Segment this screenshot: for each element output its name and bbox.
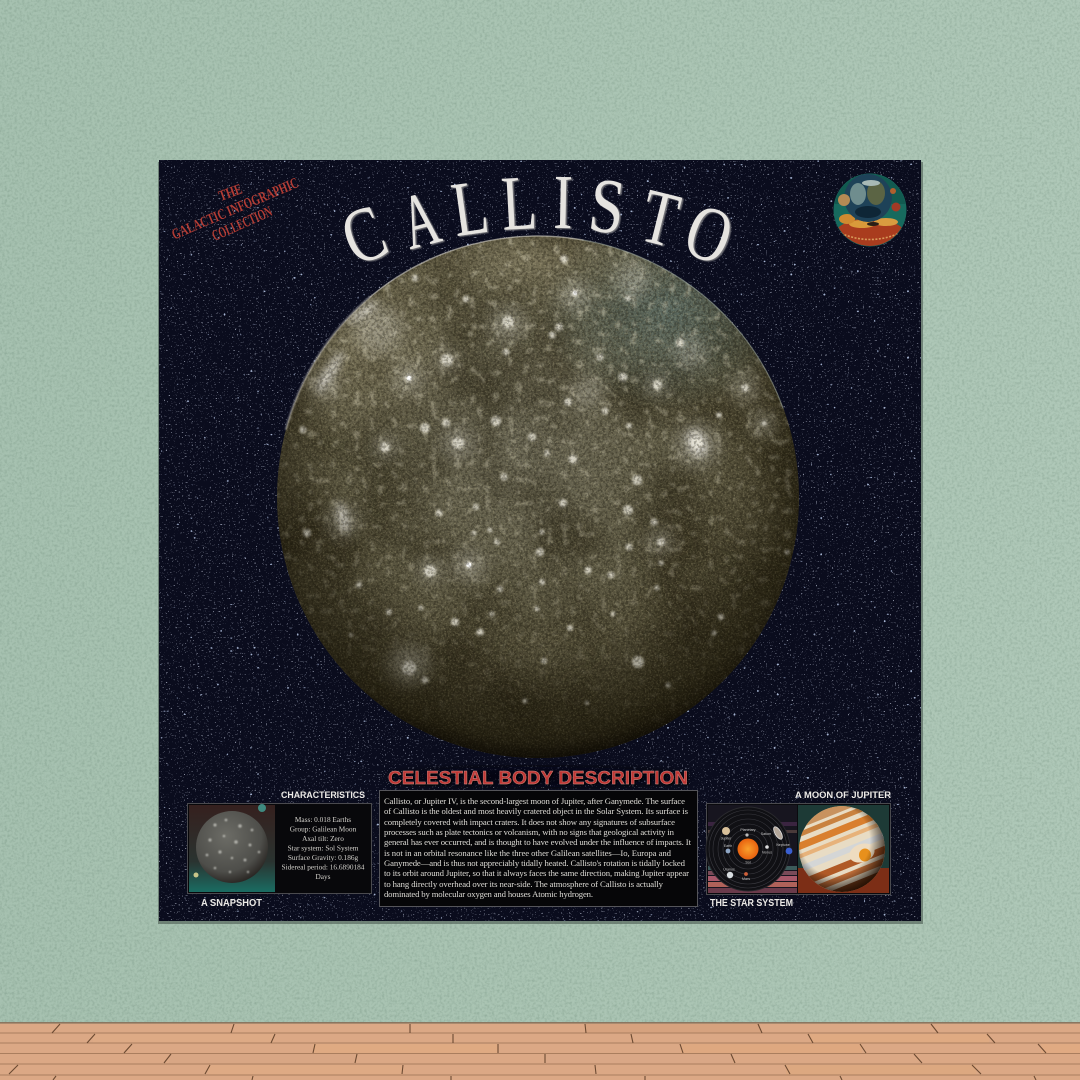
title: Callisto: L xyxy=(499,159,539,247)
poster background with stars xyxy=(159,160,921,921)
characteristics list: Sidereal period: 16.6890184 xyxy=(282,862,365,872)
description panel: dominated by molecular oxygen and houses Atomic hydrogen. xyxy=(384,889,593,899)
characteristics list: Surface Gravity: 0.186g xyxy=(288,853,359,862)
characteristics panel xyxy=(188,804,372,894)
crater halos xyxy=(311,264,776,685)
collection label: THE xyxy=(217,182,245,205)
crater rays xyxy=(313,298,711,534)
characteristics list: Axal tilt: Zero xyxy=(302,834,344,843)
snapshot image xyxy=(189,804,275,892)
characteristics list xyxy=(282,815,365,881)
characteristics list: Star system: Sol System xyxy=(288,844,359,852)
star system diagram: Saturn xyxy=(761,832,771,836)
description panel: Ganymede—and is thus not appreciably tidally heated. Callisto's rotation is tidally locked xyxy=(384,858,686,868)
description panel: of Callisto is the oldest and most heavily cratered object in the Solar System. Its surface is xyxy=(384,806,689,816)
title: Callisto: A xyxy=(392,174,448,267)
description panel: Callisto, or Jupiter IV, is the second-largest moon of Jupiter, after Ganymede. The surface xyxy=(384,796,685,806)
section heading: celestial body description: CELESTIAL BODY DESCRIPTION xyxy=(388,767,688,788)
star system diagram xyxy=(706,805,797,893)
caption: the star system: THE STAR SYSTEM xyxy=(710,898,793,909)
planet Callisto xyxy=(240,210,810,765)
star system diagram: Venus xyxy=(762,850,772,854)
star system diagram: Neptune xyxy=(776,843,790,847)
wooden floor xyxy=(0,1022,1080,1080)
title: Callisto: I xyxy=(553,158,573,245)
description panel: completely covered with impact craters. It does not show any signatures of subsurface xyxy=(384,817,675,827)
star system diagram: Planetary xyxy=(740,828,756,832)
title: Callisto: L xyxy=(447,163,493,253)
caption: a moon of jupiter: A MOON OF JUPITER xyxy=(795,790,891,801)
description panel: is not in an orbital resonance like the three other Galilean satellites—Io, Europa and xyxy=(384,848,672,858)
badge emblem xyxy=(834,174,906,246)
title: Callisto: T xyxy=(632,172,688,264)
description panel: to hang directly overhead over its near-side. The atmosphere of Callisto is actually xyxy=(384,879,664,889)
right image panel xyxy=(706,803,891,895)
rim highlight xyxy=(286,236,783,429)
star system diagram: Earth xyxy=(724,844,732,848)
title: Callisto: O xyxy=(674,186,744,282)
star system diagram: Mars xyxy=(742,877,750,881)
characteristics list: Group: Galilean Moon xyxy=(290,824,357,834)
description panel: processes such as plate tectonics or volcanism, with no signs that geological activity in xyxy=(384,827,675,837)
star system diagram: Uranus xyxy=(723,868,735,872)
star system diagram: Sol xyxy=(745,860,751,864)
caption: a snapshot: A SNAPSHOT xyxy=(201,898,262,909)
crater bright spots xyxy=(300,255,790,705)
earth in badge xyxy=(844,174,892,222)
jupiter image xyxy=(798,805,889,893)
characteristics list: Days xyxy=(316,872,331,881)
characteristics heading: CHARACTERISTICS xyxy=(281,790,365,801)
characteristics list: Mass: 0.018 Earths xyxy=(295,815,351,824)
title: Callisto: S xyxy=(584,162,629,251)
collection label: COLLECTION xyxy=(210,204,275,245)
description panel xyxy=(380,790,698,906)
description panel: to its orbit around Jupiter, so that it always faces the same direction, making Jupiter appear xyxy=(384,868,689,878)
star system diagram: Jupiter xyxy=(721,836,732,840)
poster shadow xyxy=(158,162,923,924)
title: Callisto xyxy=(329,158,744,282)
description panel: general has ever occurred, and is thought to have evolved under the influence of impacts. It xyxy=(384,837,692,847)
title: Callisto: C xyxy=(329,187,398,282)
collection label: GALACTIC INFOGRAPHIC xyxy=(170,175,301,243)
collection label xyxy=(170,175,301,245)
